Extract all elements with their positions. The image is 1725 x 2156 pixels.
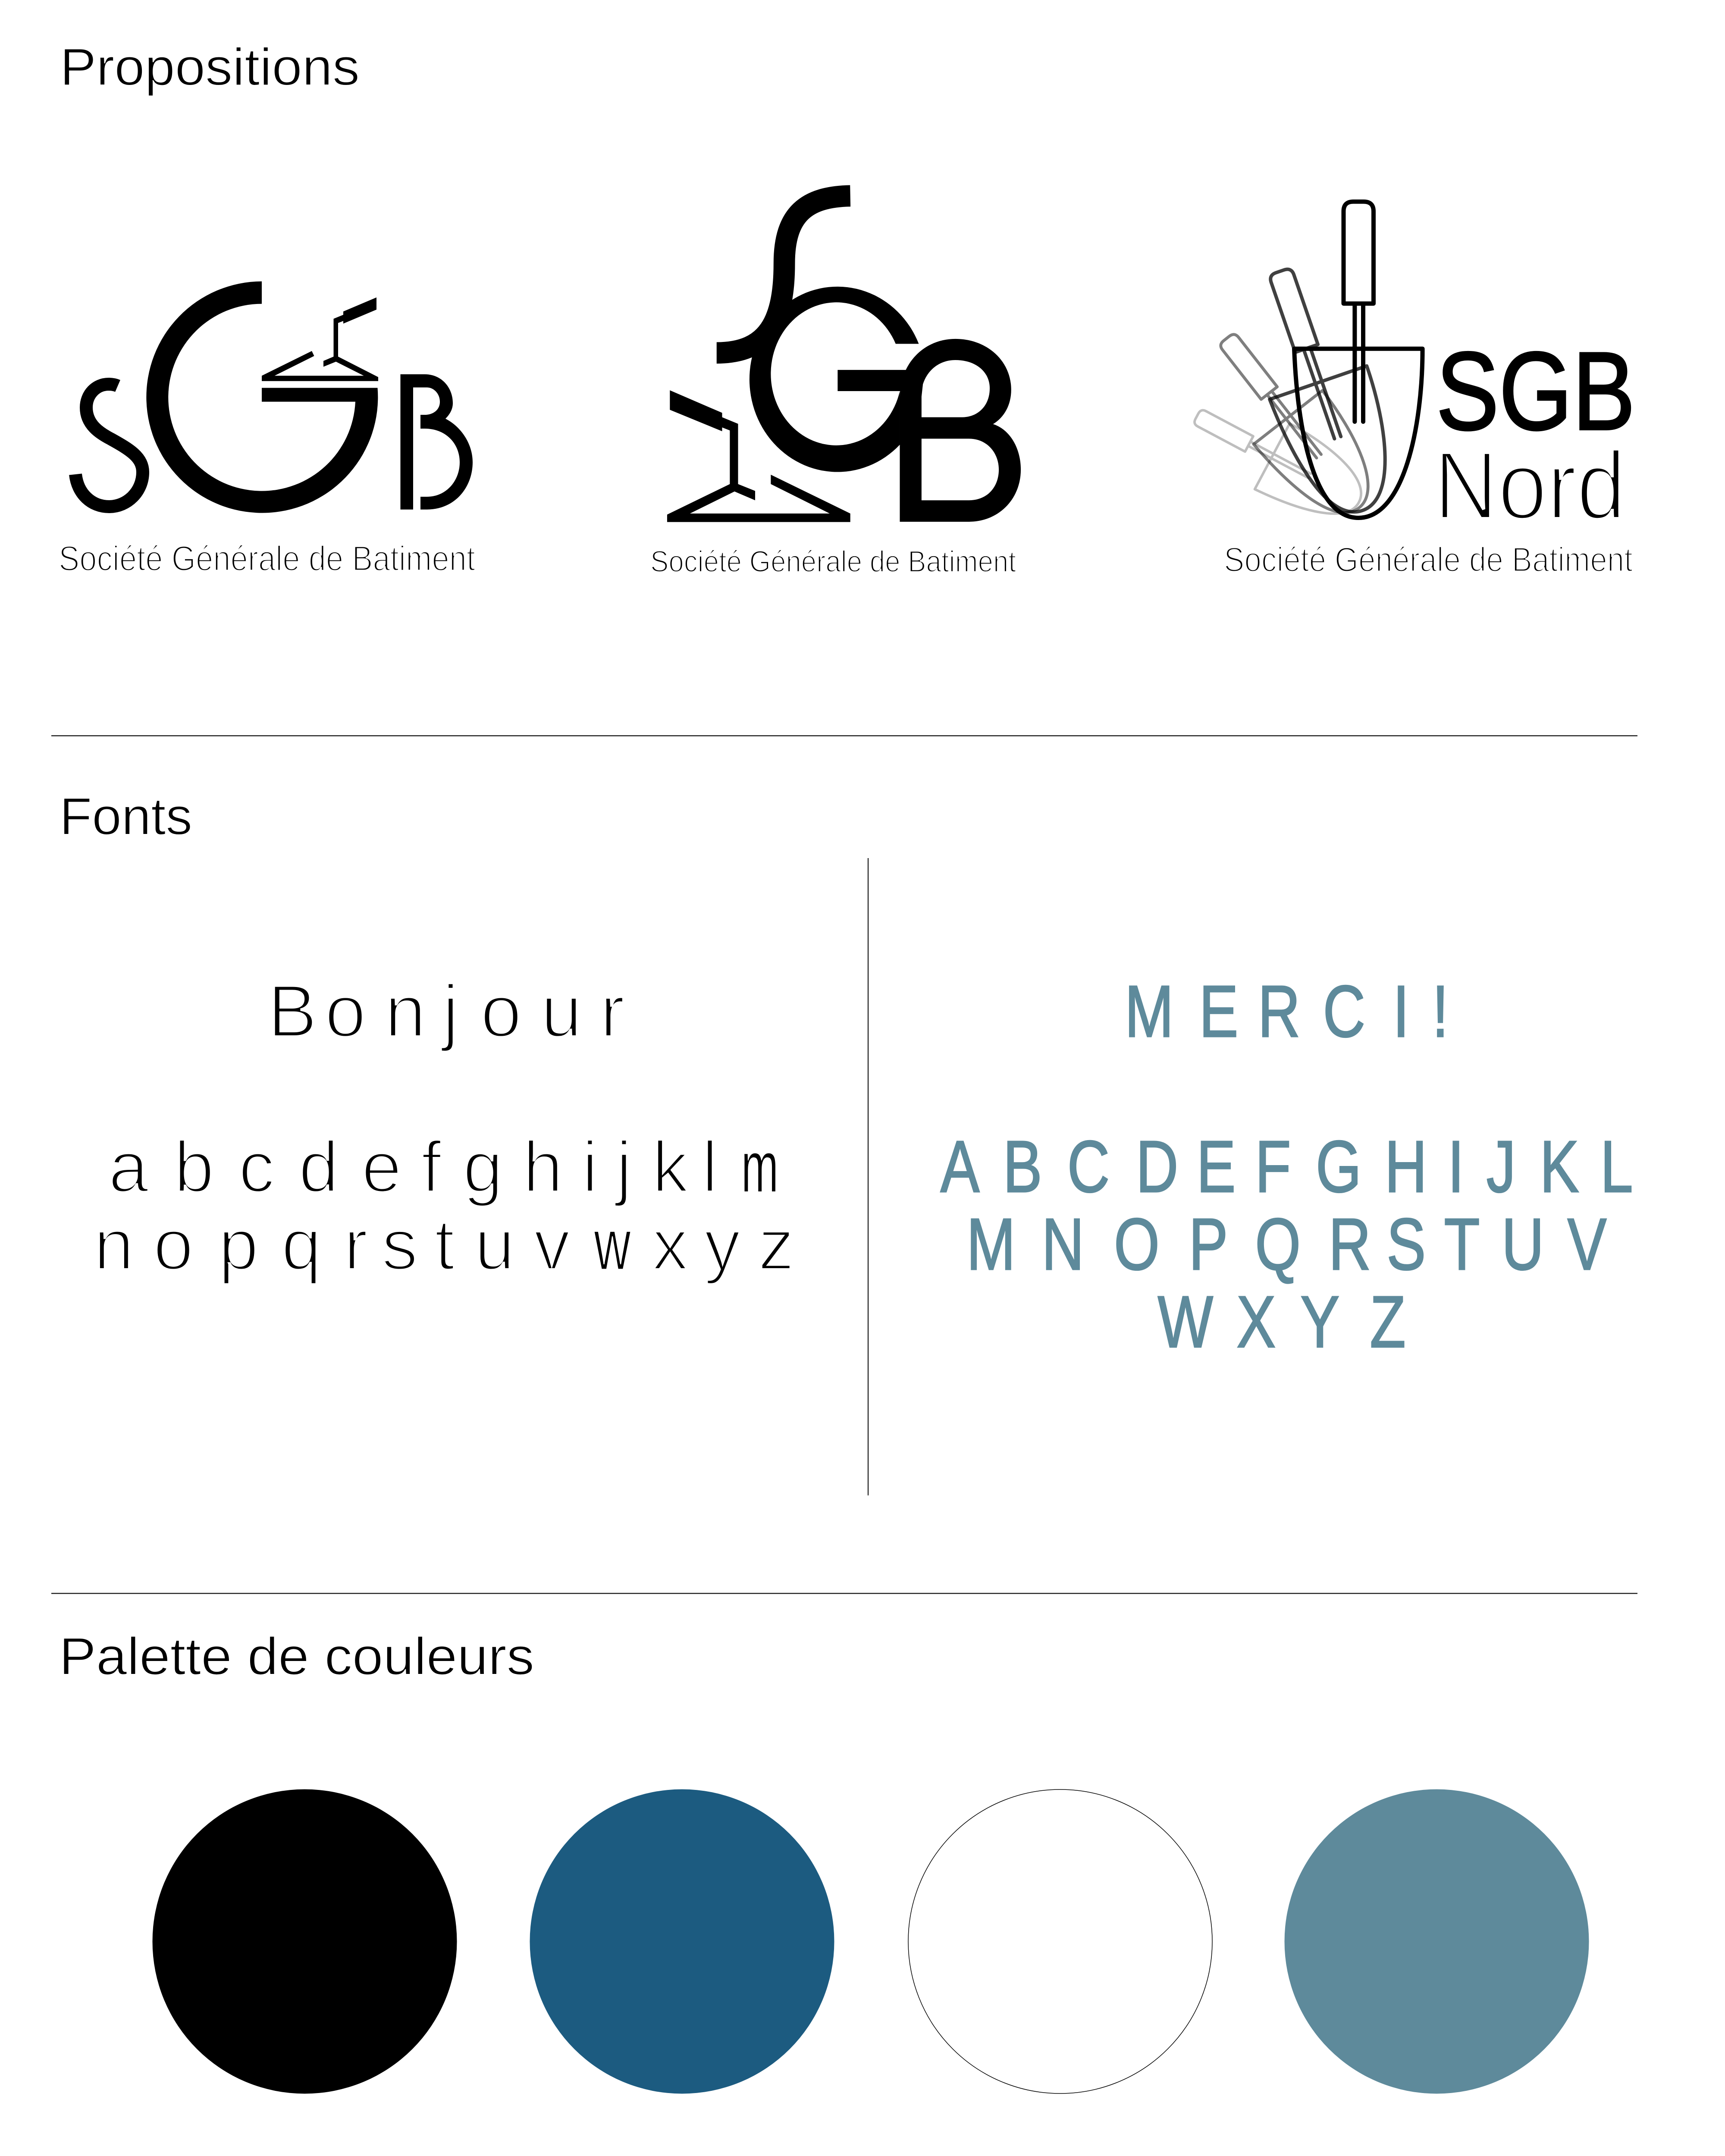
- heading: Propositions: Propositions: [60, 38, 360, 96]
- lowercase alphabet line 1: abcdefghijkl: [108, 1126, 718, 1207]
- uppercase alphabet line 1: ABCDEFGHIJKL: [941, 1126, 1633, 1207]
- swatch: teal: [1284, 1789, 1589, 2094]
- icon: main trowel: [1294, 202, 1423, 518]
- logo 1: sGB with trowel: [59, 281, 475, 578]
- heading: Palette de couleurs: Palette de couleurs: [59, 1627, 534, 1686]
- logo 1 tagline: Société Générale de Batiment: [59, 539, 475, 578]
- sample word Bonjour: Bonjour: [268, 970, 625, 1053]
- logo 3 tagline: Société Générale de Batiment: [1224, 540, 1633, 579]
- lowercase alphabet line 2: nopqrstuv: [94, 1204, 570, 1285]
- icon: trowel: [667, 390, 850, 522]
- wordmark SGB: SGB: [1436, 329, 1635, 453]
- heading: Fonts: Fonts: [60, 787, 192, 846]
- icon: faded trowel far: [1179, 383, 1376, 535]
- panel: colour palette: [153, 1789, 1589, 2094]
- letter B: [400, 374, 473, 510]
- swatch: white: [908, 1789, 1212, 2093]
- icon: trowel: [262, 298, 378, 381]
- uppercase alphabet line 2: MNOPQRSTUV: [966, 1203, 1606, 1285]
- wordmark Nord: Nord: [1434, 432, 1626, 539]
- uppercase alphabet line 3: WXYZ: [1158, 1281, 1406, 1363]
- icon: faded trowel near: [1231, 255, 1411, 527]
- icon: faded trowel middle: [1192, 312, 1393, 535]
- letter S: [717, 196, 850, 353]
- panel: thin font specimen: [94, 970, 794, 1285]
- swatch: dark blue: [530, 1789, 834, 2094]
- lowercase alphabet line 2: xyz: [652, 1204, 794, 1285]
- letter G: [750, 287, 919, 472]
- panel: uppercase font specimen: [941, 971, 1633, 1363]
- swatch: black: [153, 1789, 457, 2094]
- lowercase alphabet line 2: [94, 1204, 794, 1285]
- logo 3: SGB Nord with rotating trowels: [1179, 202, 1635, 579]
- letter B: [900, 339, 1021, 522]
- letter s: [75, 384, 143, 507]
- lowercase alphabet line 2: w: [594, 1204, 631, 1285]
- letter G: [146, 281, 378, 513]
- logo 2 tagline: Société Générale de Batiment: [650, 545, 1016, 578]
- logo 2: SGB stacked with trowel: [650, 196, 1021, 578]
- lowercase alphabet line 1: m: [741, 1126, 778, 1207]
- sample word MERCI!: MERCI!: [1125, 971, 1449, 1052]
